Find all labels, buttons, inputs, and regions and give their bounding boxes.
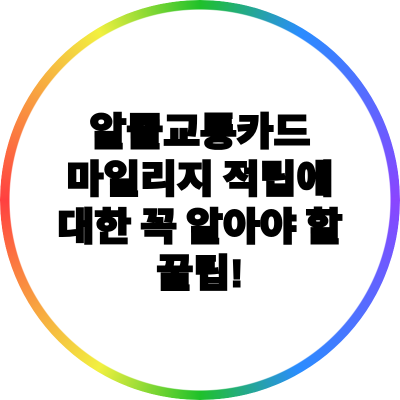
title (58, 112, 342, 296)
title: 알뜰교통카드 (90, 112, 310, 154)
title: 꿀팁! (157, 254, 243, 296)
title: 마일리지 적립에 (67, 159, 333, 201)
title: 대한 꼭 알아야 할 (58, 207, 342, 248)
